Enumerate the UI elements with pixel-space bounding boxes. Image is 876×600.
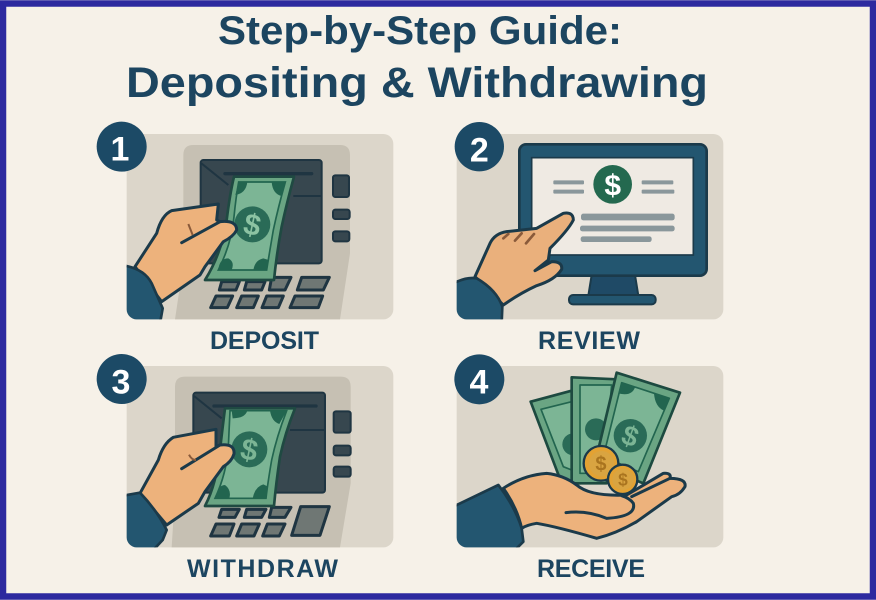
banknote (205, 177, 294, 280)
badge 4 (454, 354, 504, 404)
hand (135, 204, 237, 302)
panel: step 4 receive (453, 354, 723, 550)
fanned banknotes (531, 373, 680, 483)
panel background (127, 366, 393, 547)
screen content (553, 165, 675, 242)
ATM machine (172, 377, 351, 547)
label: withdraw: WITHDRAW (187, 555, 338, 583)
badge 3: 3 (112, 364, 130, 402)
ATM machine (175, 145, 350, 319)
title (126, 9, 708, 107)
panel background (457, 134, 723, 319)
coins (584, 446, 637, 494)
badge 2: 2 (470, 131, 489, 169)
sleeve (123, 493, 167, 550)
fanned banknotes: $ (618, 419, 643, 454)
badge 1 (97, 122, 147, 172)
label: review: REVIEW (538, 327, 640, 355)
sleeve (123, 266, 163, 323)
hand (475, 213, 573, 305)
panel: step 1 deposit (97, 122, 393, 323)
title: Step-by-Step Guide: (218, 9, 622, 53)
coins: $ (618, 470, 628, 490)
title: Depositing & Withdrawing (126, 59, 708, 107)
badge 2 (455, 122, 504, 171)
coins: $ (595, 454, 607, 476)
hand (140, 429, 234, 525)
badge 1: 1 (111, 131, 129, 169)
panel background (127, 134, 393, 319)
screen content: $ (604, 169, 621, 202)
open hand (503, 473, 685, 538)
sleeve (453, 278, 502, 323)
banknote: $ (240, 208, 264, 243)
label: receive: RECEIVE (537, 555, 645, 583)
badge 3 (97, 354, 147, 404)
badge 4: 4 (470, 364, 489, 402)
panel: step 2 review (453, 122, 723, 323)
monitor (519, 144, 707, 304)
banknote (205, 408, 295, 506)
sleeve (453, 485, 523, 550)
panel: step 3 withdraw (97, 354, 393, 550)
label: deposit: DEPOSIT (210, 327, 319, 355)
banknote: $ (237, 433, 261, 468)
panel background (457, 366, 723, 547)
